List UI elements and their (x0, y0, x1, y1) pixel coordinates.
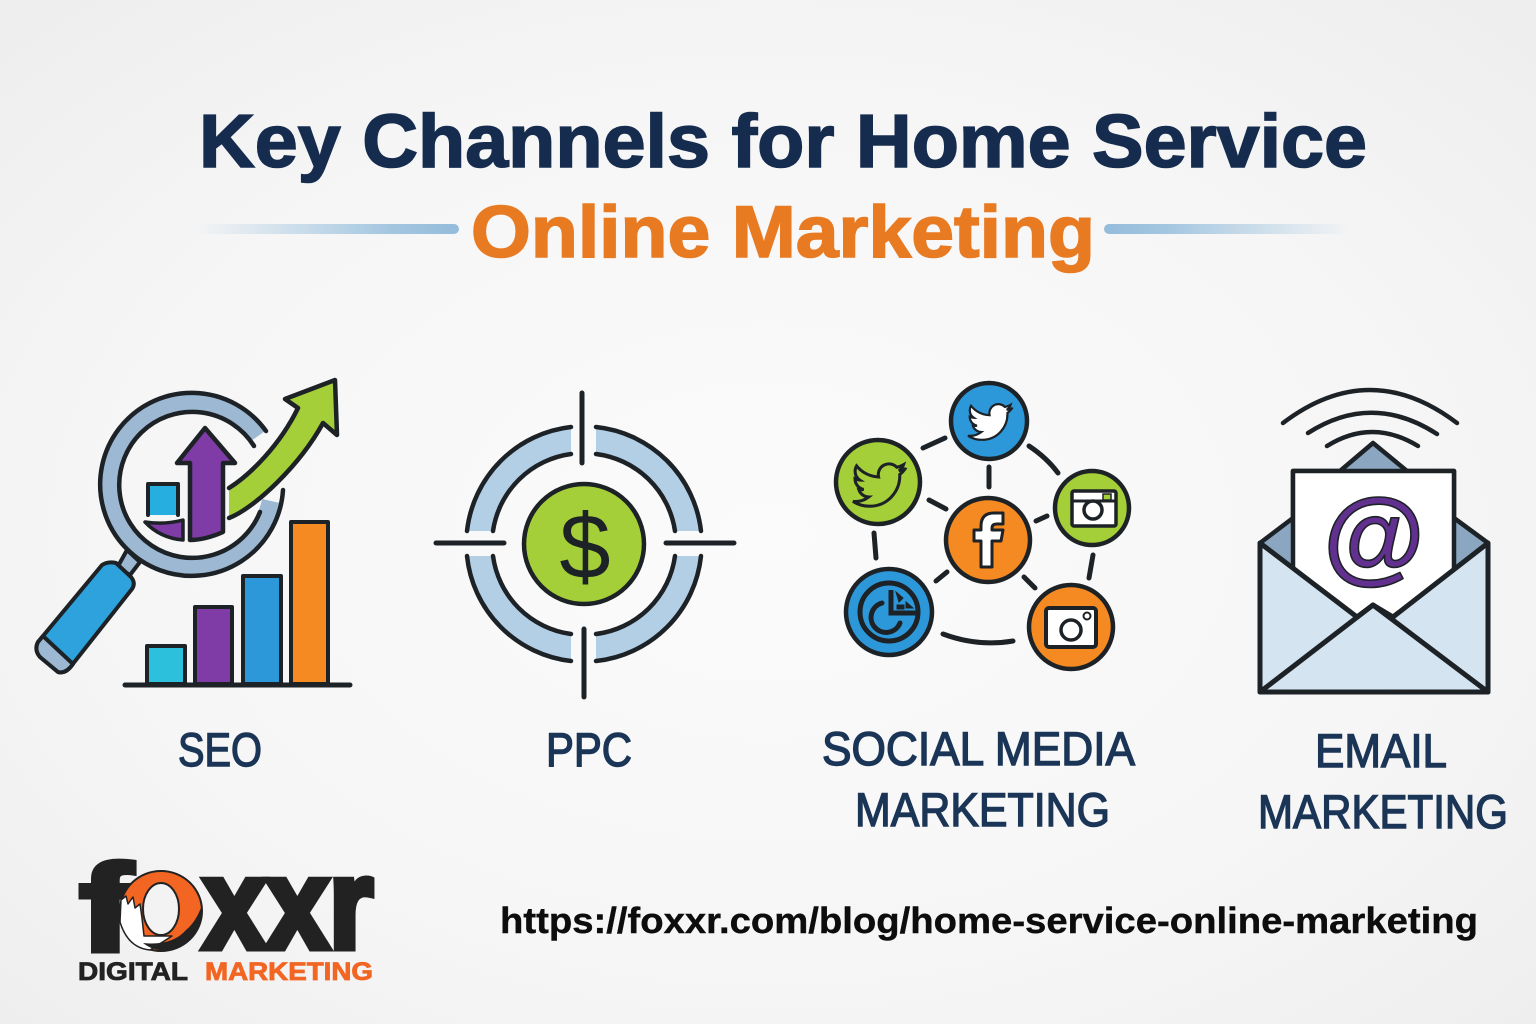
label: Email Marketing (1258, 724, 1508, 838)
instagram green node (1055, 471, 1129, 545)
growth arrow (229, 380, 337, 518)
instagram orange node (1029, 585, 1113, 669)
icon: social media network (836, 383, 1129, 669)
label: Social Media Marketing: SOCIAL MEDIA (822, 722, 1136, 775)
dollar sign: $ (559, 496, 611, 598)
title rule left (195, 224, 459, 234)
label: Email Marketing: EMAIL (1315, 724, 1447, 777)
facebook node (946, 498, 1030, 582)
twitter green node (836, 440, 920, 524)
envelope front (1260, 543, 1488, 692)
title: Online Marketing (471, 192, 1095, 273)
analytics node (846, 569, 932, 655)
bar chart (125, 522, 350, 685)
url: https://foxxr.com/blog/home-service-online-marketing (500, 900, 1478, 941)
logo wordmark: f (79, 840, 134, 978)
logo tagline marketing: MARKETING (205, 958, 373, 986)
twitter blue node (951, 383, 1027, 459)
target ring outlines (467, 427, 701, 661)
label: Social Media Marketing (822, 722, 1136, 836)
title rule right (1104, 224, 1352, 234)
label: Email Marketing: MARKETING (1258, 785, 1508, 838)
magnifier ring (109, 401, 271, 565)
magnifier handle (36, 550, 140, 672)
crosshair (436, 393, 734, 697)
logo wordmark (79, 833, 373, 978)
logo: foxxr digital marketing (78, 833, 373, 986)
icon: PPC target (436, 393, 734, 697)
title (199, 99, 1367, 273)
icon: email envelope (1260, 390, 1488, 692)
label: PPC: PPC (546, 723, 632, 776)
title: Key Channels for Home Service (199, 99, 1367, 183)
envelope back (1260, 443, 1488, 600)
target ring (467, 427, 701, 661)
connectors (874, 438, 1093, 643)
letter (1293, 471, 1454, 641)
logo tagline digital: DIGITAL (78, 958, 188, 986)
magnifier purple arrow (177, 428, 235, 540)
logo wordmark: xxr (203, 833, 373, 976)
label: Social Media Marketing: MARKETING (855, 783, 1110, 836)
magnifier purple segment (145, 520, 183, 540)
magnifier small bar (148, 484, 178, 515)
label: SEO: SEO (178, 723, 262, 776)
signal arcs (1283, 390, 1457, 446)
dollar coin (524, 484, 644, 604)
logo fox tail O (120, 871, 202, 951)
icon: SEO magnifier and growth chart (36, 380, 350, 685)
at sign: @ (1323, 478, 1425, 594)
